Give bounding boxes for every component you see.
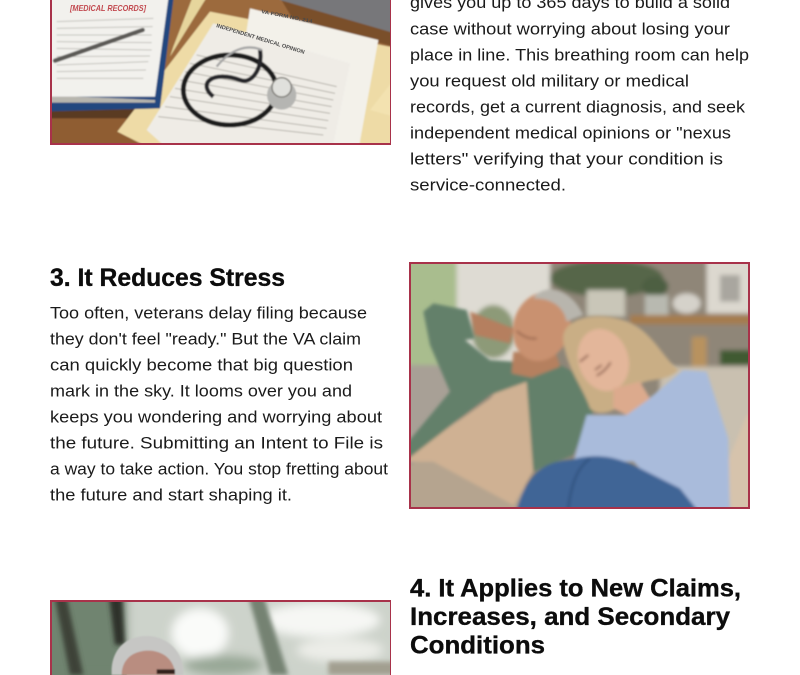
paragraph: building a solid case: case without worrying about losing your [410, 20, 731, 38]
paragraph: building a solid case: service-connected. [410, 176, 566, 194]
paragraph: building a solid case: you request old military or medical [410, 72, 689, 90]
heading: 4. It Applies to New Claims, Increases, and Secondary Conditions [410, 574, 741, 660]
paragraph: reducing stress: the future and start shaping it. [50, 486, 292, 504]
heading: 4. It Applies to New Claims, Increases, and Secondary Conditions: Conditions [410, 632, 545, 660]
paragraph: reducing stress: mark in the sky. It looms over you and [50, 382, 352, 400]
paragraph: reducing stress: a way to take action. You stop fretting about [50, 460, 388, 478]
heading: 3. It Reduces Stress: 3. It Reduces Stress [50, 264, 285, 292]
paragraph: building a solid case: letters" verifying that your condition is [410, 150, 723, 168]
heading: 4. It Applies to New Claims, Increases, and Secondary Conditions: Increases, and Secondary [410, 603, 730, 631]
image: medical records and stethoscope on desk [50, 0, 391, 145]
paragraph: reducing stress: the future. Submitting an Intent to File is [50, 434, 383, 452]
image: medical records and stethoscope on desk: INDEPENDENT MEDICAL OPINION [215, 23, 305, 56]
paragraph: reducing stress: Too often, veterans delay filing because [50, 304, 367, 322]
image: older man outdoors (cropped) [50, 600, 391, 675]
image: medical records and stethoscope on desk: [MEDICAL RECORDS] [69, 3, 147, 13]
heading: 4. It Applies to New Claims, Increases, and Secondary Conditions: 4. It Applies to New Claims, [410, 574, 741, 602]
paragraph: building a solid case: place in line. This breathing room can help [410, 46, 749, 64]
paragraph: building a solid case: independent medical opinions or "nexus [410, 124, 731, 142]
paragraph: reducing stress [50, 304, 388, 504]
paragraph: building a solid case: records, get a current diagnosis, and seek [410, 98, 746, 116]
paragraph: building a solid case [410, 0, 749, 194]
paragraph: reducing stress: keeps you wondering and worrying about [50, 408, 382, 426]
paragraph: reducing stress: can quickly become that big question [50, 356, 353, 374]
image: medical records and stethoscope on desk: VA FORM NO. 214 [261, 9, 313, 25]
image: relaxed older couple on a sofa [409, 262, 750, 509]
paragraph: reducing stress: they don't feel "ready." But the VA claim [50, 330, 361, 348]
